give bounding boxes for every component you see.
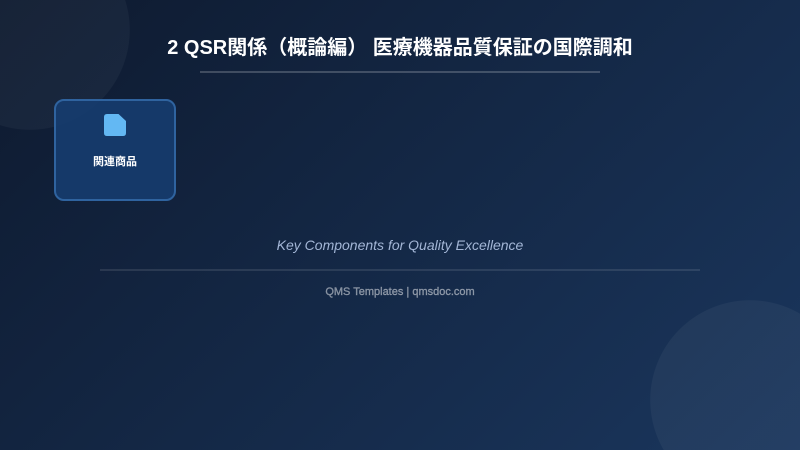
decorative circle: bottom right	[650, 300, 800, 450]
panel: related products card	[54, 99, 176, 201]
footer text: QMS Templates | qmsdoc.com	[325, 286, 475, 298]
footer divider	[100, 269, 700, 271]
icon: document	[104, 114, 126, 136]
subtitle: Key Components for Quality Excellence	[277, 237, 523, 253]
title underline	[200, 71, 600, 73]
card label: 関連商品	[93, 156, 137, 168]
decorative circle: top left	[0, 0, 130, 130]
title: 2 QSR関係（概論編） 医療機器品質保証の国際調和	[167, 37, 633, 59]
